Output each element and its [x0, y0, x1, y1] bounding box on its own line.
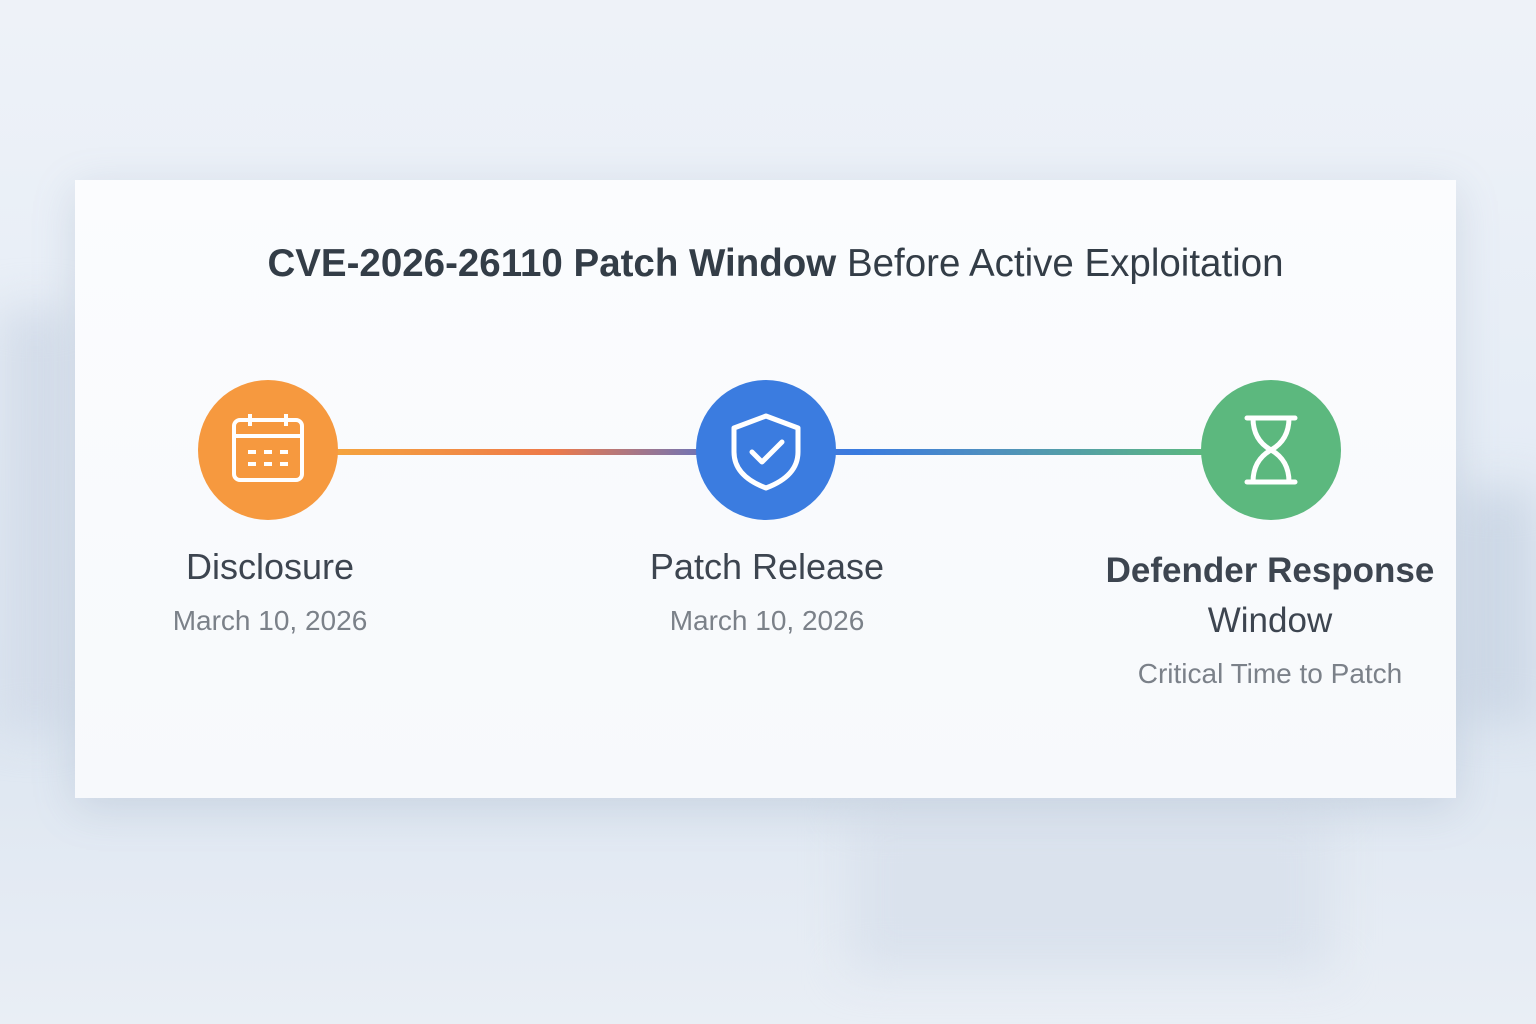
timeline connector line: [335, 449, 1205, 455]
text: disclosure: [173, 546, 367, 636]
text: defender response window: Window: [1208, 601, 1332, 640]
text: patch release: [650, 546, 884, 636]
text: disclosure: Disclosure: [186, 546, 354, 587]
text: defender response window: Defender Response: [1106, 551, 1434, 590]
icon: calendar (disclosure): [198, 380, 338, 520]
icon: shield (patch release): [696, 380, 836, 520]
icon: hourglass (defender window): [1201, 380, 1341, 520]
text: disclosure: March 10, 2026: [173, 605, 367, 636]
text: defender response window: Critical Time to Patch: [1138, 658, 1402, 689]
text: patch release: March 10, 2026: [670, 605, 864, 636]
panel: timeline card: [75, 180, 1456, 798]
text: patch release: Patch Release: [650, 546, 884, 587]
text: defender response window: [1106, 551, 1434, 689]
title: CVE-2026-26110 Patch Window Before Active Exploitation: [267, 242, 1284, 285]
